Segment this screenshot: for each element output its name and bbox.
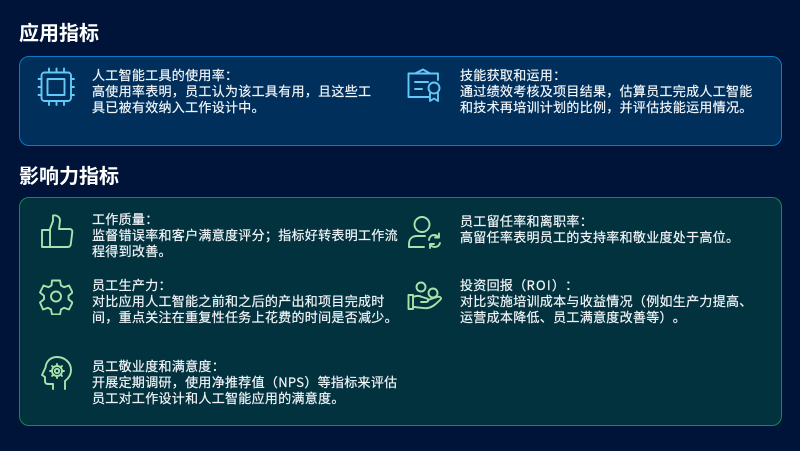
text: return on investment: 对比实施培训成本与收益情况（例如生产力提高、 bbox=[460, 291, 753, 310]
text: employee engagement and satisfaction: 开展定期调研，使用净推荐值（NPS）等指标来评估 bbox=[92, 372, 397, 391]
text: work quality: 程得到改善。 bbox=[92, 241, 172, 260]
text: AI tool usage rate bbox=[92, 65, 371, 116]
text: employee productivity: 对比应用人工智能之前和之后的产出和项目完成时 bbox=[92, 291, 385, 310]
icon: AI chip bbox=[38, 68, 75, 106]
icon: skill certificate bbox=[408, 68, 440, 102]
text: skill acquisition and application bbox=[460, 65, 753, 116]
text: AI tool usage rate: 高使用率表明，员工认为该工具有用，且这些工 bbox=[92, 81, 371, 100]
text: employee productivity bbox=[92, 275, 398, 326]
text: return on investment bbox=[460, 275, 753, 326]
text: retention and turnover: 员工留任率和离职率： bbox=[460, 211, 593, 230]
text: work quality: 工作质量： bbox=[92, 209, 159, 228]
text: skill acquisition and application: 技能获取和运用： bbox=[460, 65, 566, 84]
icon: person with refresh arrows bbox=[408, 216, 441, 249]
icon: thumbs up bbox=[41, 214, 74, 248]
text: employee productivity: 间，重点关注在重复性任务上花费的时间是否减少。 bbox=[92, 307, 398, 326]
text: skill acquisition and application: 通过绩效考核及项目结果，估算员工完成人工智能 bbox=[460, 81, 753, 100]
text: AI tool usage rate: 具已被有效纳入工作设计中。 bbox=[92, 97, 265, 116]
panel: application metrics bbox=[19, 56, 782, 146]
text: skill acquisition and application: 和技术再培训计划的比例，并评估技能运用情况。 bbox=[460, 97, 753, 116]
text: employee engagement and satisfaction bbox=[92, 356, 397, 407]
icon: head with gear bbox=[41, 356, 72, 390]
text: return on investment: 投资回报（ROI）： bbox=[460, 275, 578, 294]
text: employee productivity: 员工生产力： bbox=[92, 275, 172, 294]
text: AI tool usage rate: 人工智能工具的使用率： bbox=[92, 65, 238, 84]
text: employee engagement and satisfaction: 员工敬业度和满意度： bbox=[92, 356, 225, 375]
heading: impact metrics: 影响力指标 bbox=[19, 160, 119, 189]
icon: gear bbox=[39, 280, 73, 315]
text: work quality: 监督错误率和客户满意度评分；指标好转表明工作流 bbox=[92, 225, 398, 244]
text: retention and turnover bbox=[460, 211, 739, 246]
text: employee engagement and satisfaction: 员工对工作设计和人工智能应用的满意度。 bbox=[92, 388, 345, 407]
text: work quality bbox=[92, 209, 398, 260]
heading: application metrics: 应用指标 bbox=[19, 17, 99, 46]
panel: impact metrics bbox=[19, 197, 782, 426]
text: return on investment: 运营成本降低、员工满意度改善等）。 bbox=[460, 307, 686, 326]
text: retention and turnover: 高留任率表明员工的支持率和敬业度处于高位。 bbox=[460, 227, 739, 246]
icon: hand holding coins bbox=[408, 282, 442, 310]
